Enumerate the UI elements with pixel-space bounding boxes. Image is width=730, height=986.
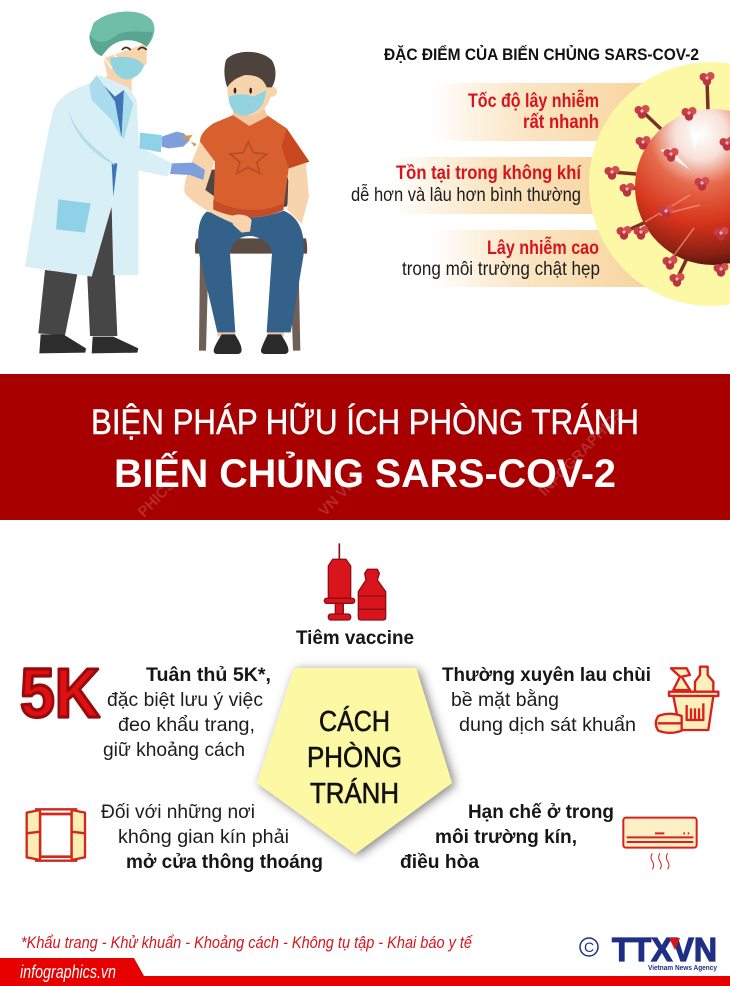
centre pentagon: prevention methods	[257, 668, 452, 854]
centre pentagon: prevention methods: PHÒNG	[307, 741, 402, 774]
footer bar: infographics.vn	[20, 962, 116, 982]
banner: title: BIỆN PHÁP HỮU ÍCH PHÒNG TRÁNH	[91, 402, 639, 442]
text: fast transmission: rất nhanh	[523, 111, 599, 133]
text: avoid closed spaces: môi trường kín,	[435, 826, 577, 848]
logo: TTXVN: TTXVN	[612, 931, 717, 968]
footer bar	[0, 958, 730, 986]
illustration: doctor vaccinating patient	[25, 12, 309, 354]
text: airborne survival: dễ hơn và lâu hơn bình thường	[351, 183, 581, 206]
logo: TTXVN: C	[584, 939, 594, 955]
logo: TTXVN: Vietnam News Agency	[648, 965, 717, 972]
banner: title	[0, 374, 730, 521]
text: airborne survival: Tồn tại trong không khí	[396, 162, 581, 184]
text: fast transmission: Tốc độ lây nhiễm	[468, 88, 599, 112]
banner: title: PHICS	[135, 476, 179, 521]
text: follow 5K	[103, 664, 271, 761]
text: surface cleaning: bề mặt bằng	[451, 688, 559, 711]
text: avoid closed spaces: điều hòa	[400, 851, 479, 873]
gradient bands	[392, 83, 647, 287]
icon: air conditioner	[623, 818, 697, 869]
logo: TTXVN	[580, 931, 717, 972]
text: high infection	[402, 235, 600, 280]
text: open windows: Đối với những nơi	[101, 801, 255, 823]
banner: title: BIẾN CHỦNG SARS-COV-2	[114, 450, 616, 496]
icon: virus on yellow disc	[589, 62, 730, 306]
patient on chair	[184, 52, 309, 354]
text: fast transmission	[468, 88, 599, 133]
heading: characteristics: ĐẶC ĐIỂM CỦA BIẾN CHỦNG SARS-COV-2	[384, 45, 699, 64]
footnote: 5K definition: *Khẩu trang - Khử khuẩn - Khoảng cách - Không tụ tập - Khai báo y tế	[21, 933, 473, 952]
text: high infection: Lây nhiễm cao	[487, 235, 599, 259]
icon: open window	[27, 809, 85, 861]
text: follow 5K: giữ khoảng cách	[103, 739, 245, 761]
label: vaccine: Tiêm vaccine	[296, 627, 414, 649]
text: open windows: không gian kín phải	[118, 826, 289, 848]
text: avoid closed spaces: Hạn chế ở trong	[468, 801, 614, 823]
text: surface cleaning: Thường xuyên lau chùi	[442, 664, 651, 686]
text: surface cleaning: dung dịch sát khuẩn	[459, 714, 636, 736]
text: high infection: trong môi trường chật hẹp	[402, 258, 600, 280]
centre pentagon: prevention methods: TRÁNH	[310, 777, 399, 810]
text: avoid closed spaces	[400, 801, 614, 873]
panel: variant characteristics	[351, 45, 730, 306]
text: follow 5K: Tuân thủ 5K*,	[146, 664, 271, 686]
text: open windows: mở cửa thông thoáng	[126, 851, 323, 873]
centre pentagon: prevention methods: CÁCH	[319, 705, 390, 738]
text: follow 5K: đeo khẩu trang,	[118, 714, 255, 736]
icon: 5K: 5K	[20, 654, 100, 732]
banner: title: INFOGRAPHICS	[536, 405, 628, 500]
text: surface cleaning	[442, 664, 651, 736]
icon: syringe and vial	[324, 543, 386, 620]
text: open windows	[101, 801, 323, 873]
banner: title: VN VNA	[316, 467, 367, 520]
icon: cleaning supplies	[656, 667, 718, 733]
text: airborne survival	[351, 162, 581, 206]
doctor	[25, 12, 205, 353]
text: follow 5K: đặc biệt lưu ý việc	[107, 689, 263, 711]
